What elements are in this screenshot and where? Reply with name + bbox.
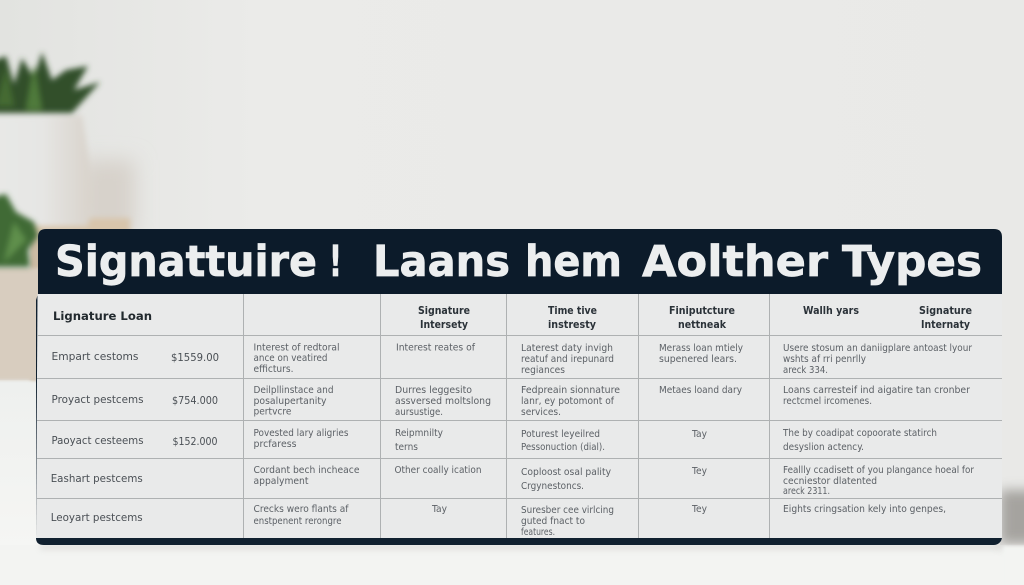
row 3: $152.000: [172, 436, 218, 448]
row 4: Other coally ication: [394, 465, 482, 476]
row 4: Crgynestoncs.: [521, 481, 584, 492]
row 4: [51, 465, 974, 497]
row 2: lanr, ey potomont of: [521, 396, 615, 407]
row 4: Cordant bech incheace: [254, 465, 360, 476]
row 4: Coploost osal pality: [521, 467, 611, 478]
title bar: [38, 229, 1002, 294]
row 2: Metaes loand dary: [659, 385, 742, 396]
row 1: wshts af rri penrlly: [783, 354, 866, 365]
row 5: guted fnact to: [521, 516, 585, 527]
row 5: enstpenent rerongre: [254, 516, 342, 527]
title: Signattuire: [55, 237, 317, 287]
row 2: [52, 385, 970, 418]
header row: [53, 305, 972, 331]
row 4: cecniestor dlatented: [783, 476, 877, 487]
row 2: Fedpreain sionnature: [521, 385, 620, 396]
row 1: supenered lears.: [659, 354, 737, 365]
row 3: Pessonuction (dial).: [521, 442, 605, 453]
header row: Finiputcture: [669, 305, 735, 317]
row 5: Tey: [691, 504, 707, 515]
row 5: Crecks wero flants af: [254, 504, 349, 515]
header row: Internaty: [921, 319, 970, 331]
decorative plant: upper white pot: [0, 52, 135, 236]
row 2: Loans carresteif ind aigatire tan cronber: [783, 385, 970, 396]
title: Aolther: [642, 237, 829, 287]
row 1: areck 334.: [783, 365, 828, 376]
row 1: ance on veatired: [254, 353, 328, 364]
row 1: Laterest daty invigh: [521, 343, 613, 354]
row 4: Tey: [691, 466, 707, 477]
row 2: $754.000: [172, 395, 218, 407]
row 2: services.: [521, 407, 561, 418]
row 5: Tay: [431, 504, 447, 515]
header row: instresty: [548, 319, 596, 331]
panel: comparison board: [36, 229, 1002, 545]
row 1: Interest reates of: [396, 342, 476, 354]
row 4: areck 2311.: [783, 486, 830, 497]
row 1: [52, 342, 972, 376]
header row: Lignature Loan: [53, 309, 152, 323]
row 2: aursustige.: [395, 407, 443, 418]
table background: [36, 294, 1002, 538]
row 2: rectcmel ircomenes.: [783, 396, 872, 407]
header row: nettneak: [678, 319, 727, 331]
row 3: prcfaress: [254, 439, 296, 450]
row 3: [52, 428, 937, 453]
row 4: Eashart pestcems: [51, 473, 143, 485]
header row: Time tive: [548, 305, 597, 317]
row 4: Feallly ccadisett of you plangance hoeal for: [783, 465, 974, 476]
row 3: Tay: [691, 429, 707, 440]
grid lines: [37, 294, 1002, 538]
row 3: Povested lary aligries: [254, 428, 348, 439]
row 5: features.: [521, 527, 555, 538]
row 2: posalupertanity: [254, 396, 327, 407]
row 1: regiances: [521, 365, 565, 376]
header row: Intersety: [420, 319, 468, 331]
decorative plant: lower beige pot: [0, 194, 44, 380]
row 3: terns: [395, 442, 418, 453]
row 1: $1559.00: [171, 352, 219, 364]
row 2: Deilpllinstace and: [254, 385, 334, 396]
row 1: efficturs.: [254, 364, 294, 375]
row 3: desyslion actency.: [783, 442, 864, 453]
row 1: Empart cestoms: [52, 351, 138, 363]
row 3: Paoyact cesteems: [52, 435, 144, 447]
row 2: Proyact pestcems: [52, 394, 144, 406]
row 5: Eights cringsation kely into genpes,: [783, 504, 946, 515]
row 5: Leoyart pestcems: [51, 512, 143, 524]
row 3: Reipmnilty: [395, 428, 443, 439]
title: Types: [842, 237, 982, 287]
row 5: [51, 504, 946, 538]
title: !: [329, 237, 342, 287]
row 4: appalyment: [254, 476, 309, 487]
row 1: Usere stosum an daniigplare antoast lyour: [783, 343, 972, 354]
title: hem: [525, 237, 622, 287]
title: [55, 237, 982, 287]
row 1: Merass loan mtiely: [659, 343, 743, 354]
title: Laans: [373, 237, 510, 287]
row 2: assversed moltslong: [395, 396, 491, 407]
header row: Wallh yars: [803, 305, 859, 317]
row 2: pertvcre: [254, 406, 292, 418]
header row: Signature: [919, 305, 972, 317]
board body and footer strip: [36, 294, 1002, 545]
row 1: Interest of redtoral: [254, 342, 340, 354]
header row: Signature: [418, 305, 470, 317]
row 3: Poturest leyeilred: [521, 429, 600, 440]
row 3: The by coadipat copoorate statirch: [782, 428, 937, 439]
row 1: reatuf and irepunard: [521, 354, 614, 365]
row 2: Durres leggesito: [395, 385, 472, 396]
row 5: Suresber cee virlcing: [521, 505, 614, 516]
